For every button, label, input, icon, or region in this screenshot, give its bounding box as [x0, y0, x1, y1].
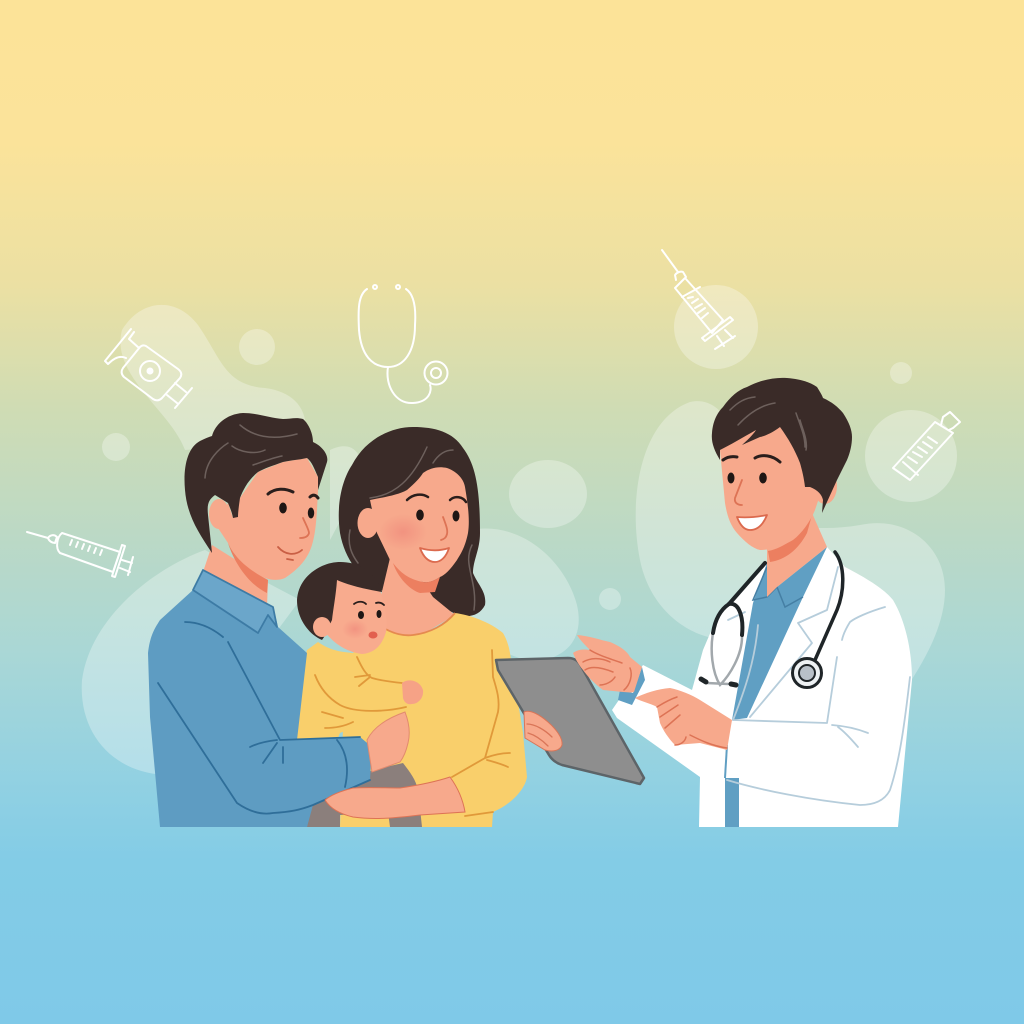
doctor ear	[813, 468, 837, 504]
figure: doctor	[573, 378, 912, 827]
figure: baby	[295, 562, 423, 827]
mother ear	[358, 508, 378, 538]
doctor coat edge	[725, 745, 727, 778]
icon: vial right	[893, 412, 960, 480]
mother sweater folds	[452, 650, 510, 816]
doctor coat lines	[727, 567, 910, 805]
father brows and mouth	[268, 489, 318, 560]
baby blush	[342, 619, 368, 639]
doctor shirt lower strip	[725, 778, 739, 827]
baby pants	[307, 763, 422, 827]
doctor upper hand	[573, 635, 642, 692]
father hand	[367, 712, 409, 772]
tablet	[496, 658, 644, 784]
baby hair	[297, 562, 382, 640]
doctor upper hand fingers	[583, 650, 631, 690]
father sweater	[148, 570, 372, 827]
doctor shirt	[732, 547, 827, 720]
father collar	[193, 570, 277, 633]
doctor hair	[712, 378, 852, 513]
background blobs	[82, 285, 957, 775]
mother sweater	[340, 613, 527, 827]
baby ear	[313, 617, 331, 637]
baby eyes and brows	[354, 602, 384, 619]
doctor neck	[767, 513, 827, 597]
baby sleeve lines	[315, 657, 406, 728]
doctor brows and nose	[723, 456, 780, 505]
baby hand	[402, 680, 423, 704]
baby mouth	[368, 632, 378, 638]
mother hair	[339, 427, 485, 616]
father neck shadow	[228, 543, 268, 593]
icon: stethoscope outline	[359, 285, 448, 403]
father face	[216, 458, 318, 580]
father hair	[185, 413, 327, 553]
mother eyes	[416, 510, 460, 522]
mother brows and nose	[407, 495, 466, 540]
mother smile	[420, 548, 449, 562]
mother hand on tablet	[524, 711, 562, 751]
baby body	[295, 642, 406, 745]
figure: mother	[339, 427, 527, 827]
mother hair strands	[349, 447, 475, 610]
icon: medical device top left	[105, 329, 192, 408]
doctor lower hand fingers	[657, 697, 727, 748]
father hair strands	[205, 425, 297, 478]
doctor coat right	[725, 547, 912, 827]
doctor hair strands	[730, 397, 806, 450]
doctor lower hand	[635, 688, 732, 750]
mother neck shadow	[393, 563, 440, 593]
icon: syringe top right	[662, 250, 735, 349]
father ear	[209, 499, 229, 529]
mother arm	[325, 777, 465, 818]
doctor face	[720, 420, 825, 550]
doctor cuff	[618, 667, 645, 705]
baby face	[325, 578, 387, 654]
mother hand fingers	[527, 724, 552, 746]
doctor smile	[737, 515, 767, 530]
doctor neck shadow	[768, 515, 812, 562]
doctor eyes	[728, 472, 767, 484]
father eyes	[279, 502, 314, 518]
doctor stethoscope	[701, 552, 843, 688]
doctor collar	[753, 567, 803, 607]
icon: syringe left	[27, 532, 133, 577]
figure: father	[148, 413, 409, 827]
father neck	[197, 545, 268, 607]
mother neck	[380, 558, 455, 640]
father sweater lines	[158, 622, 370, 814]
mother blush	[379, 514, 427, 550]
mother face	[370, 467, 469, 582]
doctor coat left	[612, 563, 767, 827]
